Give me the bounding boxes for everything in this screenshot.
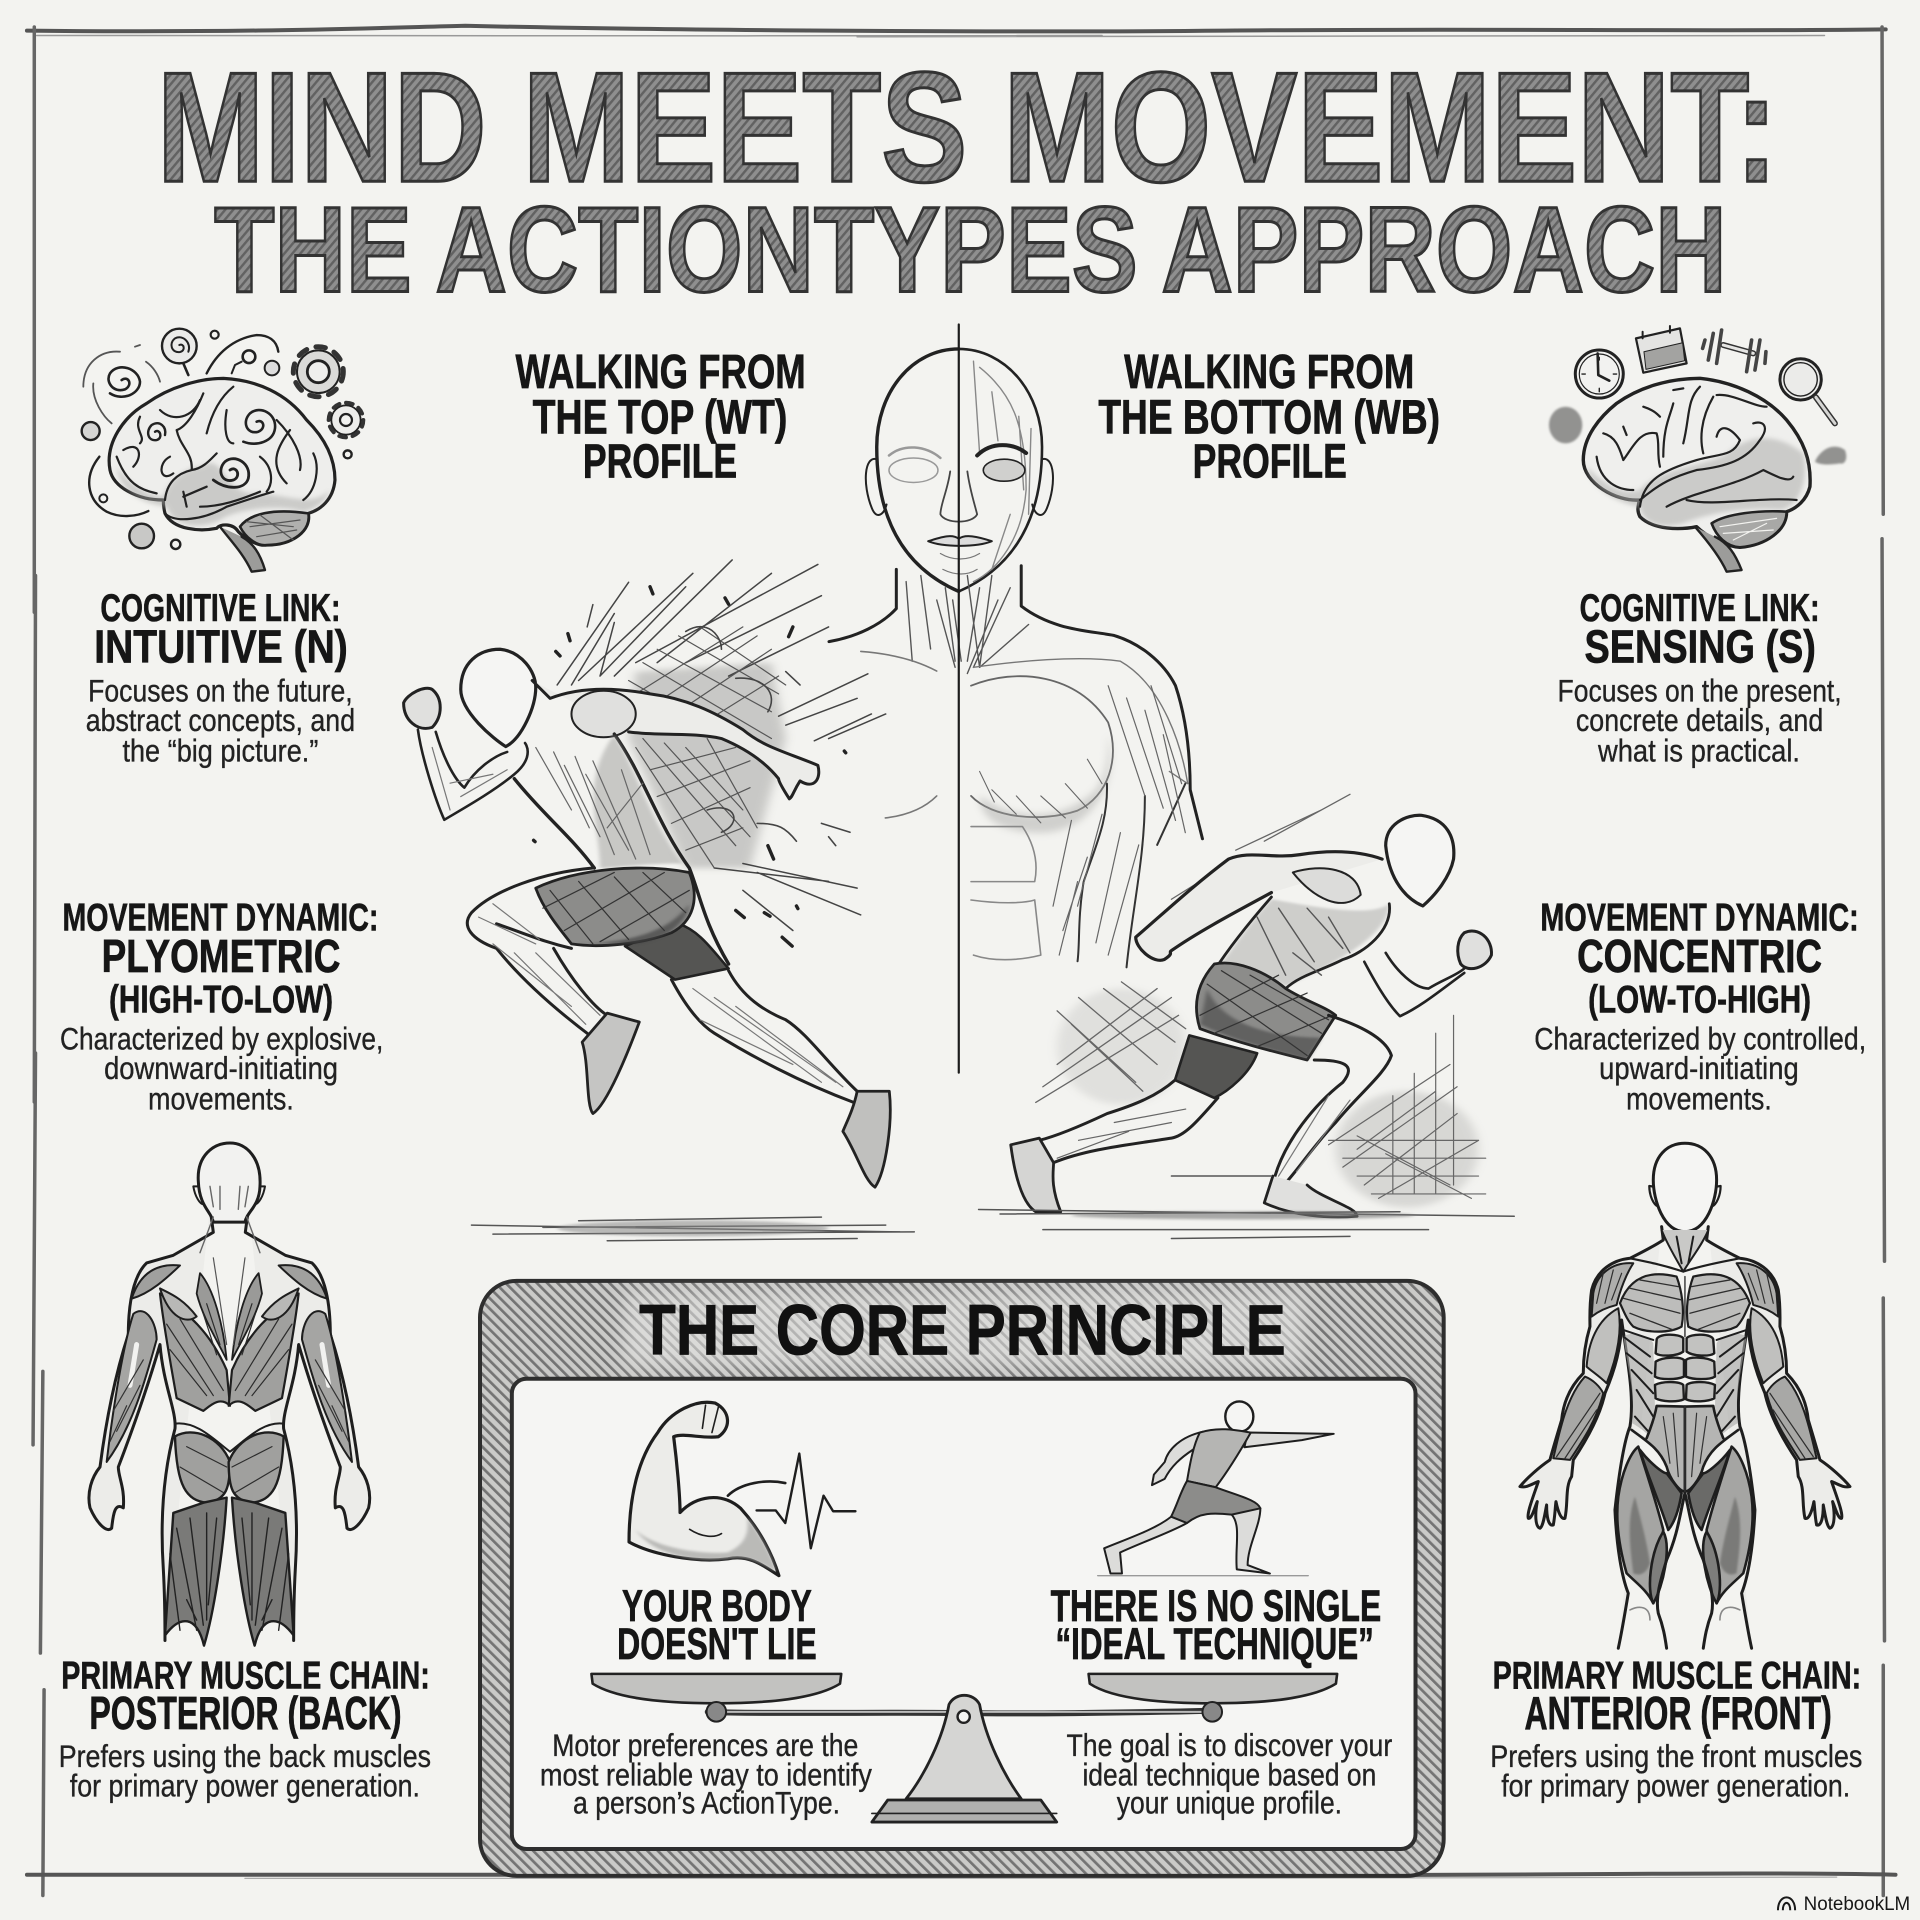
text: primary muscle chain anterior: for primary power generation.: [1501, 1767, 1850, 1803]
text: movement dynamic concentric: upward-initiating: [1599, 1050, 1799, 1086]
text: cognitive link sensing: what is practical.: [1597, 733, 1800, 769]
text: movement dynamic concentric: (LOW-TO-HIGH): [1588, 979, 1811, 1022]
text: cognitive link sensing: COGNITIVE LINK:: [1580, 587, 1820, 630]
text: no single ideal technique: [1051, 1582, 1381, 1669]
watermark: NotebookLM: NotebookLM: [1804, 1893, 1910, 1915]
header band highlight: [624, 1293, 1304, 1367]
text: movement dynamic plyometric: PLYOMETRIC: [102, 930, 340, 982]
text: your body doesn't lie: DOESN'T LIE: [617, 1620, 817, 1669]
text: cognitive link intuitive: Focuses on the future,: [88, 673, 353, 709]
heading: walking from the top: WALKING FROM: [516, 346, 806, 399]
icon: balance scale: [591, 1674, 1337, 1822]
text: motor preferences: most reliable way to identify: [540, 1756, 872, 1792]
text: cognitive link intuitive: [86, 587, 355, 769]
heading: walking from the bottom: [1098, 346, 1440, 489]
text: primary muscle chain posterior: for primary power generation.: [70, 1767, 420, 1803]
text: cognitive link sensing: Focuses on the present,: [1558, 673, 1842, 709]
text: primary muscle chain anterior: [1490, 1655, 1862, 1803]
icon: lunging figure: [1098, 1401, 1334, 1576]
text: movement dynamic concentric: CONCENTRIC: [1577, 930, 1822, 982]
text: movement dynamic concentric: Characterized by controlled,: [1534, 1020, 1866, 1056]
text: movement dynamic plyometric: (HIGH-TO-LOW): [109, 979, 333, 1022]
text: movement dynamic plyometric: movements.: [148, 1080, 294, 1116]
icon: flexed arm with pulse: [629, 1402, 855, 1576]
illustration: anterior muscle figure: [1520, 1143, 1850, 1648]
text: movement dynamic plyometric: Characterized by explosive,: [60, 1020, 383, 1056]
heading: walking from the bottom: WALKING FROM: [1124, 346, 1414, 399]
heading: walking from the top: THE TOP (WT): [533, 391, 787, 444]
text: the goal: The goal is to discover your: [1067, 1727, 1393, 1763]
text: movement dynamic concentric: [1534, 897, 1866, 1116]
text: cognitive link sensing: concrete details, and: [1576, 702, 1823, 738]
text: movement dynamic concentric: movements.: [1626, 1080, 1772, 1116]
text: primary muscle chain anterior: Prefers using the front muscles: [1490, 1738, 1862, 1774]
text: no single ideal technique: “IDEAL TECHNIQUE”: [1056, 1620, 1374, 1669]
text: cognitive link intuitive: the “big picture.”: [122, 733, 318, 769]
panel frame: [480, 1281, 1444, 1876]
text: motor preferences: Motor preferences are the: [552, 1727, 858, 1763]
text: the goal: your unique profile.: [1117, 1784, 1342, 1820]
illustration: plyometric runner: [404, 560, 914, 1241]
text: the goal: ideal technique based on: [1082, 1756, 1376, 1792]
text: movement dynamic plyometric: MOVEMENT DYNAMIC:: [62, 897, 378, 940]
text: primary muscle chain posterior: POSTERIOR (BACK): [89, 1687, 402, 1739]
text: cognitive link intuitive: abstract concepts, and: [86, 702, 355, 738]
illustration: central split face and torso: [829, 324, 1202, 1073]
panel heading: THE CORE PRINCIPLE: [639, 1291, 1286, 1370]
text: motor preferences: [540, 1727, 872, 1820]
text: your body doesn't lie: YOUR BODY: [622, 1582, 812, 1631]
text: motor preferences: a person’s ActionType.: [573, 1784, 840, 1820]
text: no single ideal technique: THERE IS NO SINGLE: [1051, 1582, 1381, 1631]
text: the goal: [1067, 1727, 1393, 1820]
heading: walking from the bottom: THE BOTTOM (WB): [1098, 391, 1440, 444]
text: movement dynamic plyometric: [60, 897, 383, 1116]
icon: intuitive brain: [82, 329, 363, 572]
text: movement dynamic plyometric: downward-initiating: [104, 1050, 338, 1086]
panel inner area: [512, 1379, 1416, 1849]
title: [157, 40, 1778, 317]
heading: walking from the top: PROFILE: [583, 436, 737, 489]
text: cognitive link intuitive: INTUITIVE (N): [94, 620, 348, 672]
text: cognitive link intuitive: COGNITIVE LINK:: [100, 587, 340, 630]
text: cognitive link sensing: [1558, 587, 1842, 769]
panel: the core principle: [480, 1281, 1444, 1876]
text: your body doesn't lie: [617, 1582, 817, 1669]
icon: sensing brain: [1549, 326, 1846, 572]
text: primary muscle chain posterior: Prefers using the back muscles: [59, 1738, 431, 1774]
text: primary muscle chain posterior: [59, 1655, 431, 1803]
illustration: concentric runner: [979, 794, 1514, 1239]
text: primary muscle chain posterior: PRIMARY MUSCLE CHAIN:: [61, 1655, 430, 1698]
heading: walking from the top: [516, 346, 806, 489]
text: cognitive link sensing: SENSING (S): [1584, 620, 1816, 672]
heading: walking from the bottom: PROFILE: [1193, 436, 1347, 489]
illustration: posterior muscle figure: [89, 1143, 370, 1646]
